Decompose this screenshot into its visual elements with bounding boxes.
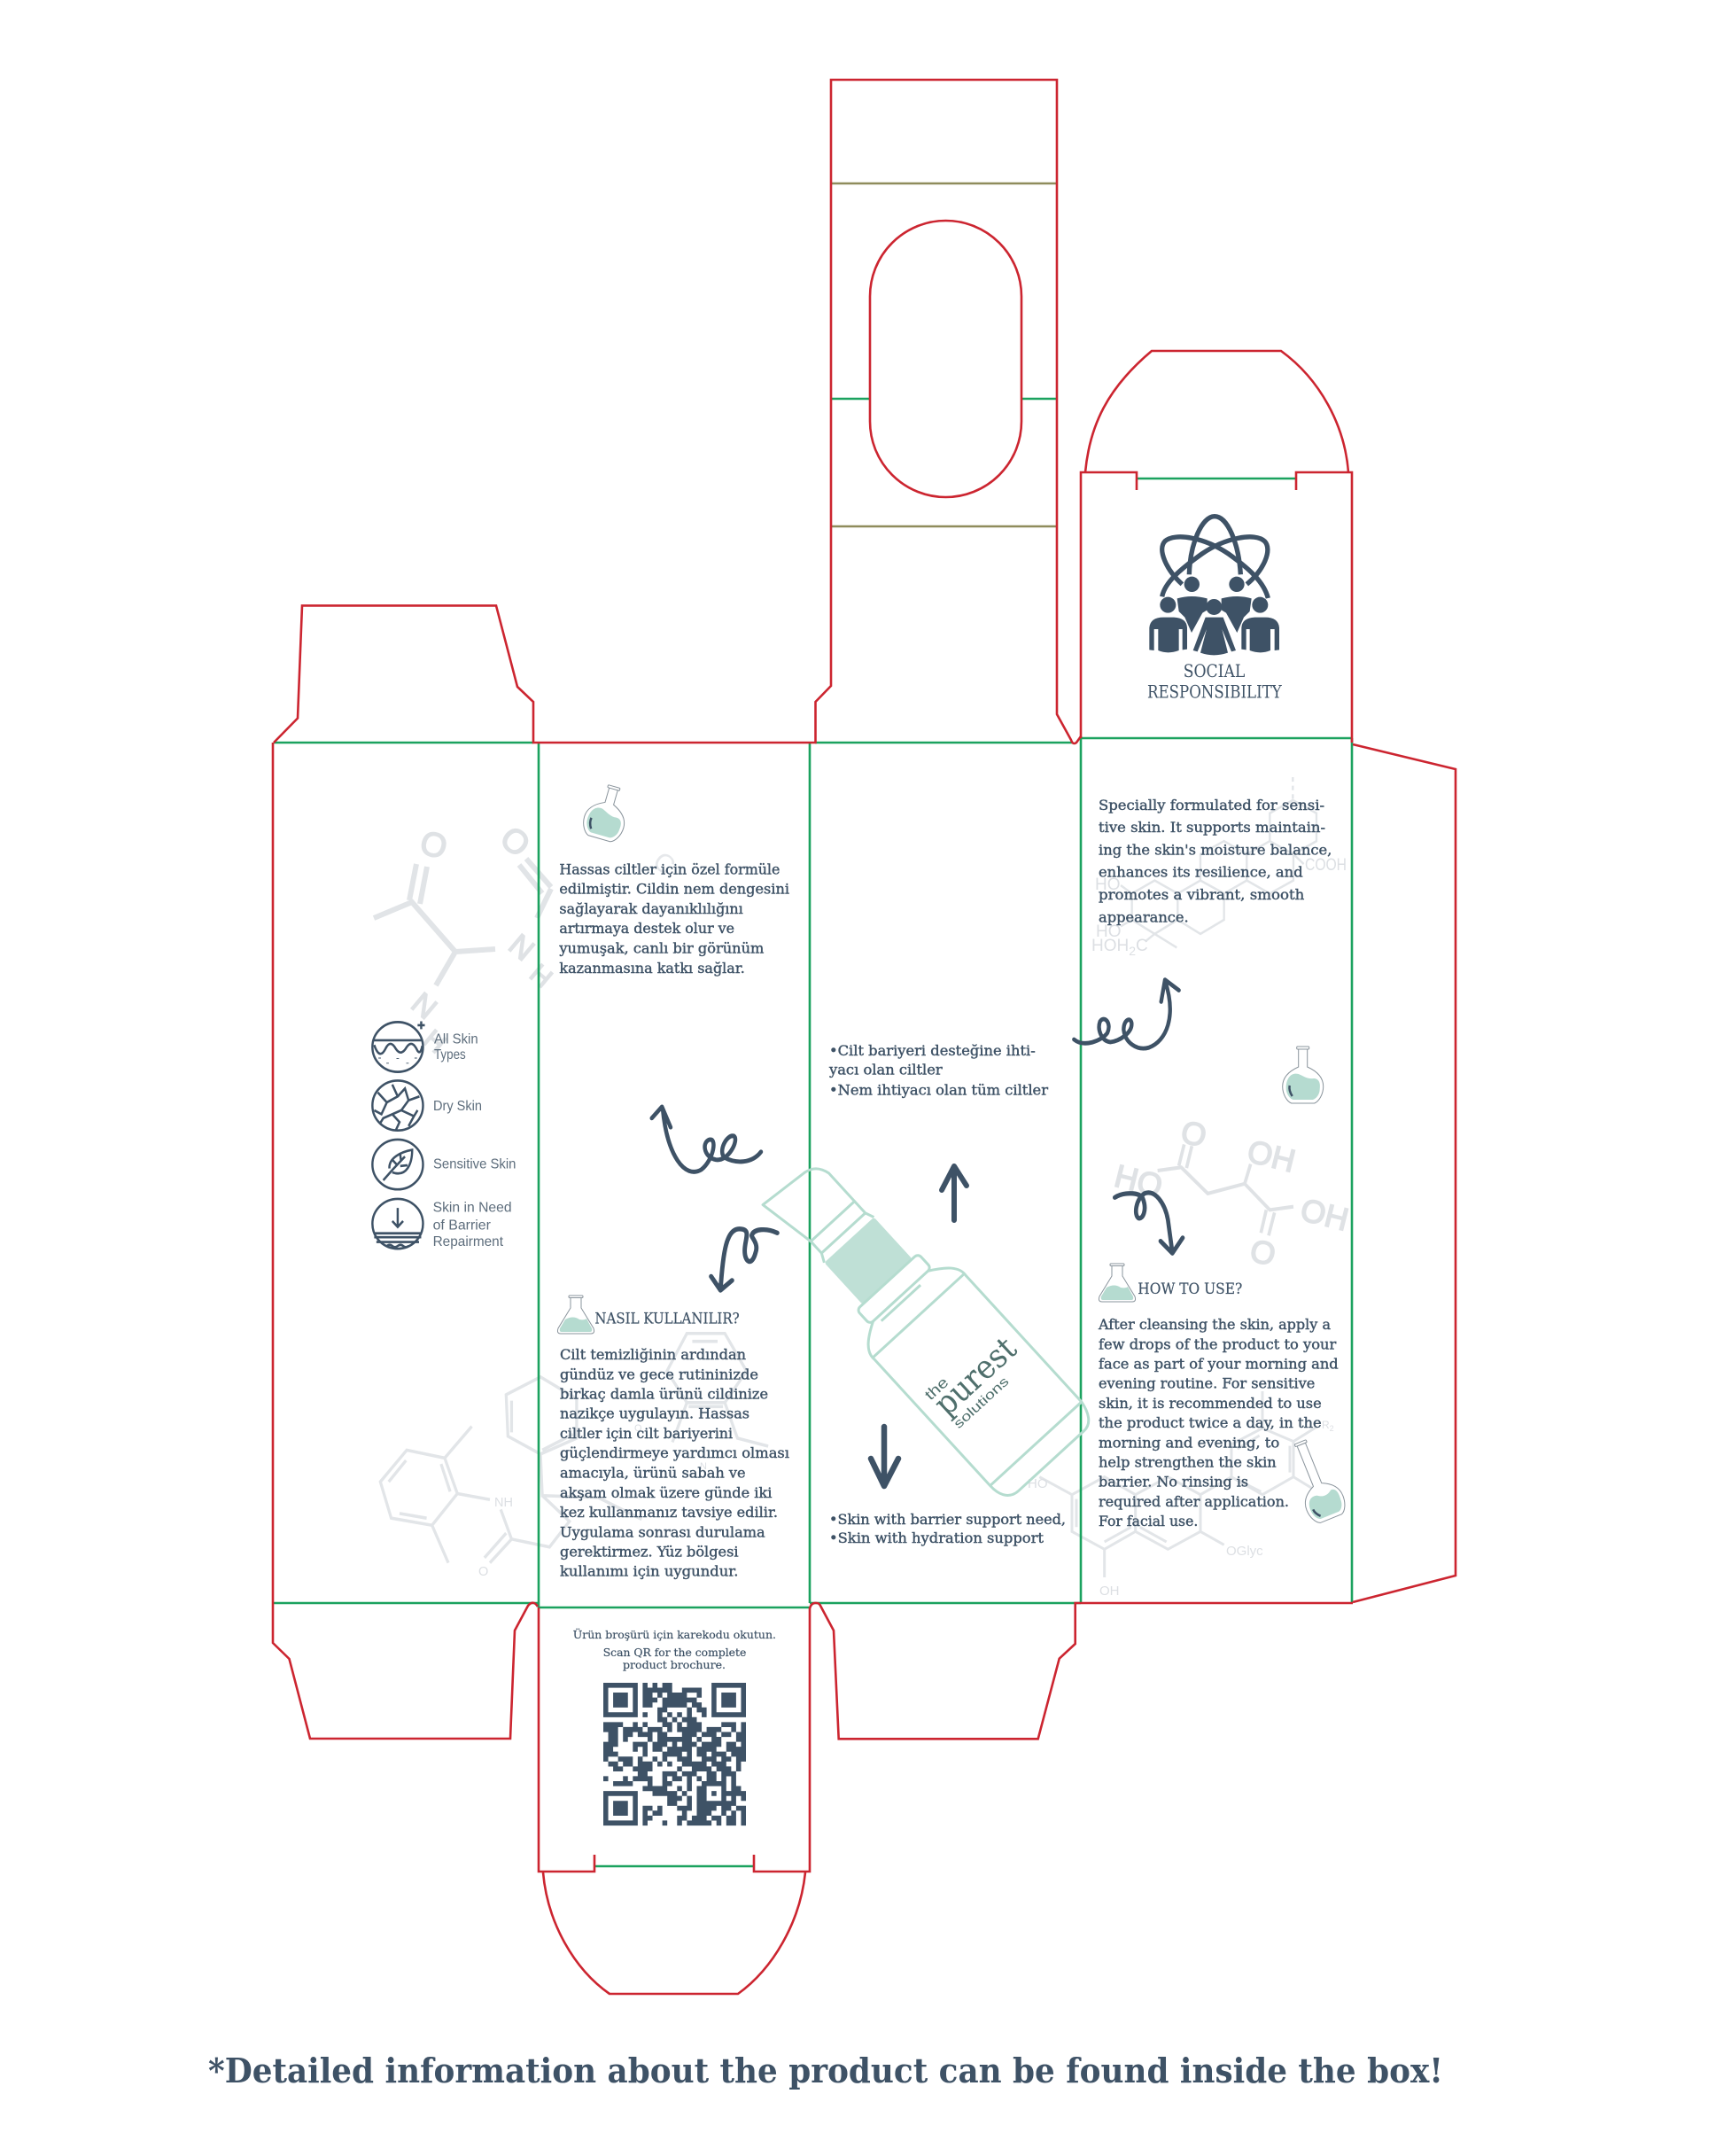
molecule: left panel amino structure: H (418, 1024, 451, 1059)
text block: Turkish how to use: kullanımı için uygundur. (560, 1563, 739, 1580)
heading: social responsibility (1147, 660, 1282, 702)
text block: English product description: Specially formulated for sensi- (1099, 797, 1324, 813)
molecule: flavonoid structure lower right: 2 (1330, 1424, 1334, 1433)
text block: English target skin list (829, 1511, 1066, 1546)
text block: English how to use: For facial use. (1099, 1513, 1198, 1529)
icon: erlenmeyer flask, English how-to (1099, 1264, 1136, 1302)
molecule: steroid structure behind English intro: C (1136, 937, 1148, 955)
product bottle illustration (746, 1136, 1098, 1503)
cut lines (273, 80, 1456, 1994)
icon: dry skin (372, 1080, 423, 1131)
molecule: flavonoid structure lower right: HO (1028, 1476, 1047, 1491)
text block: English how to use: morning and evening, to (1099, 1434, 1279, 1451)
molecule: steroid structure behind English intro: HOH (1091, 937, 1129, 955)
arrow: curly down-left (711, 1229, 777, 1290)
molecule: left panel amino structure: H (524, 959, 557, 993)
caption: *Detailed information about the product can be found inside the box! (208, 2051, 1443, 2090)
text block: English product description (1099, 797, 1332, 925)
labels: skin types (433, 1031, 516, 1249)
molecule: steroid structure behind English intro: HO (1096, 922, 1122, 941)
text block: English product description: enhances its resilience, and (1099, 864, 1303, 881)
text block: Turkish product description: kazanmasına katkı sağlar. (559, 960, 745, 977)
molecule: left panel amino structure: N (502, 928, 540, 968)
arrow: straight up (942, 1166, 967, 1220)
text block: Turkish how to use: gerektirmez. Yüz bölgesi (560, 1543, 739, 1560)
text block: Turkish how to use (560, 1346, 789, 1580)
bottle brand label: purest (927, 1329, 1024, 1423)
text block: English how to use (1098, 1316, 1339, 1529)
text block: Turkish how to use: gündüz ve gece rutininizde (560, 1366, 758, 1382)
text block: Turkish how to use: Uygulama sonrası durulama (560, 1524, 765, 1540)
icon: round flask, Turkish intro (579, 781, 633, 844)
heading: social responsibility: RESPONSIBILITY (1147, 681, 1282, 702)
bottle brand label: solutions (951, 1374, 1012, 1432)
heading: HOW TO USE: HOW TO USE? (1138, 1280, 1242, 1298)
molecule: left panel amino structure (374, 820, 680, 1059)
molecule: malic acid structure: O (1177, 1113, 1210, 1155)
text block: Turkish how to use: ciltler için cilt bariyerini (560, 1425, 733, 1442)
text block: Turkish product description: edilmiştir. Cildin nem dengesini (559, 881, 789, 898)
text block: English product description: appearance. (1099, 908, 1189, 925)
molecule: lidocaine style structure lower left (380, 1334, 768, 1579)
text block: Turkish how to use: akşam olmak üzere günde iki (560, 1484, 772, 1501)
molecule: left panel amino structure: N (405, 986, 443, 1026)
text block: English product description: tive skin. It supports maintain- (1099, 819, 1325, 836)
box dieline (273, 80, 1456, 1994)
text block: Turkish product description: sağlayarak dayanıklılığını (559, 900, 743, 917)
text block: English product description: promotes a vibrant, smooth (1099, 886, 1304, 903)
legend: skin type icons (372, 1021, 516, 1249)
molecule: lidocaine style structure lower left: O (634, 1423, 642, 1434)
text block: Turkish target skin list (828, 1042, 1048, 1098)
text block: Turkish how to use: birkaç damla ürünü cildinize (560, 1386, 768, 1403)
text block: English how to use: After cleansing the skin, apply a (1098, 1316, 1331, 1333)
icon: round flask, upright (1283, 1047, 1324, 1103)
icon: all skin types (372, 1021, 425, 1072)
molecule: malic acid structure (1111, 1113, 1352, 1273)
text block: English how to use: the product twice a day, in the (1099, 1414, 1322, 1431)
bottle brand label: the (921, 1374, 951, 1404)
molecule: steroid structure behind English intro (1091, 777, 1347, 958)
molecule: left panel amino structure: C (648, 846, 680, 881)
molecule: flavonoid structure lower right: OH (1099, 1584, 1120, 1599)
molecule: steroid structure behind English intro: COOH (1305, 856, 1347, 875)
text block: QR instructions: Ürün broşürü için karekodu okutun. (573, 1627, 776, 1641)
text block: English how to use: barrier. No rinsing is (1099, 1474, 1248, 1491)
labels: skin types: Sensitive Skin (433, 1157, 516, 1172)
arrow: curly down-right (1114, 1193, 1183, 1253)
text block: English how to use: face as part of your morning and (1099, 1355, 1339, 1372)
text block: English product description: ing the skin's moisture balance, (1099, 842, 1332, 858)
text block: Turkish product description: artırmaya destek olur ve (559, 920, 734, 937)
arrow: curly up-right (1074, 980, 1179, 1048)
text block: Turkish product description: Hassas ciltler için özel formüle (559, 860, 780, 877)
arrow: curly up-left (652, 1107, 761, 1171)
molecule: lidocaine style structure lower left: NH (494, 1496, 513, 1510)
molecule: flavonoid structure lower right: R (1322, 1419, 1330, 1431)
molecule: malic acid structure: OH (1244, 1132, 1299, 1179)
labels: skin types: Types (434, 1047, 466, 1062)
icon: sensitive skin (372, 1140, 423, 1189)
labels: skin types: Skin in Need (433, 1201, 512, 1216)
text block: Turkish how to use: Cilt temizliğinin ardından (560, 1346, 746, 1363)
text block: Turkish target skin list: •Cilt bariyeri desteğine ihti- (829, 1042, 1036, 1059)
QR code (603, 1685, 746, 1823)
heading: social responsibility: SOCIAL (1184, 660, 1245, 681)
fold lines (273, 399, 1352, 1866)
text block: Turkish how to use: kez kullanmanız tavsiye edilir. (560, 1504, 778, 1521)
icon: long neck flask, tilted (1282, 1435, 1349, 1526)
labels: skin types: Dry Skin (433, 1099, 482, 1114)
text block: QR instructions: product brochure. (623, 1658, 726, 1671)
text block: English how to use: skin, it is recommended to use (1099, 1395, 1322, 1412)
text block: QR instructions: Scan QR for the complete (603, 1646, 746, 1659)
molecule: left panel amino structure: O (493, 820, 537, 865)
molecule: malic acid structure: OH (1297, 1191, 1352, 1238)
text block: Turkish how to use: amacıyla, ürünü sabah ve (560, 1465, 746, 1482)
text block: Turkish how to use: nazikçe uygulayın. Hassas (560, 1405, 749, 1422)
molecule: left panel amino structure: O (416, 824, 451, 867)
text block: English how to use: help strengthen the skin (1099, 1453, 1277, 1470)
molecule: flavonoid structure lower right (1028, 1391, 1334, 1599)
perforation lines (831, 183, 1057, 526)
labels: skin types: Repairment (433, 1234, 504, 1249)
text block: Turkish product description: yumuşak, canlı bir görünüm (558, 940, 764, 957)
molecule: flavonoid structure lower right: R (1322, 1487, 1330, 1499)
molecule: steroid structure behind English intro: 2 (1129, 944, 1136, 958)
text block: QR instructions (573, 1627, 776, 1671)
text block: English how to use: evening routine. For sensitive (1099, 1375, 1315, 1392)
text block: Turkish target skin list: yacı olan ciltler (828, 1062, 943, 1078)
text block: English how to use: few drops of the product to your (1099, 1335, 1337, 1352)
molecule: steroid structure behind English intro: HO (1095, 876, 1120, 894)
text block: Turkish target skin list: •Nem ihtiyacı olan tüm ciltler (829, 1081, 1048, 1098)
text block: English how to use: required after application. (1099, 1493, 1289, 1510)
text block: Turkish how to use: güçlendirmeye yardımcı olması (560, 1444, 789, 1461)
labels: skin types: All Skin (434, 1031, 478, 1047)
icon: social responsibility atom and people (1149, 517, 1279, 655)
text block: Turkish product description (558, 860, 789, 977)
molecule: malic acid structure: O (1246, 1232, 1279, 1273)
bottle pump block (824, 1218, 912, 1304)
molecule: malic acid structure: HO (1111, 1157, 1166, 1204)
arrow: straight down (871, 1427, 898, 1486)
molecule: lidocaine style structure lower left: O (478, 1565, 488, 1579)
heading: NASIL KULLANILIR: NASIL KULLANILIR? (594, 1311, 740, 1328)
icon: erlenmeyer flask, Turkish how-to (557, 1296, 594, 1334)
molecule: flavonoid structure lower right: OGlyc (1226, 1544, 1263, 1559)
icon: barrier repair (372, 1199, 423, 1249)
labels: skin types: of Barrier (433, 1218, 492, 1233)
molecule: lidocaine style structure lower left: N (700, 1461, 707, 1472)
text block: English target skin list: •Skin with barrier support need, (829, 1511, 1066, 1528)
text block: English target skin list: •Skin with hydration support (829, 1529, 1044, 1546)
bottle outline (746, 1136, 1098, 1503)
